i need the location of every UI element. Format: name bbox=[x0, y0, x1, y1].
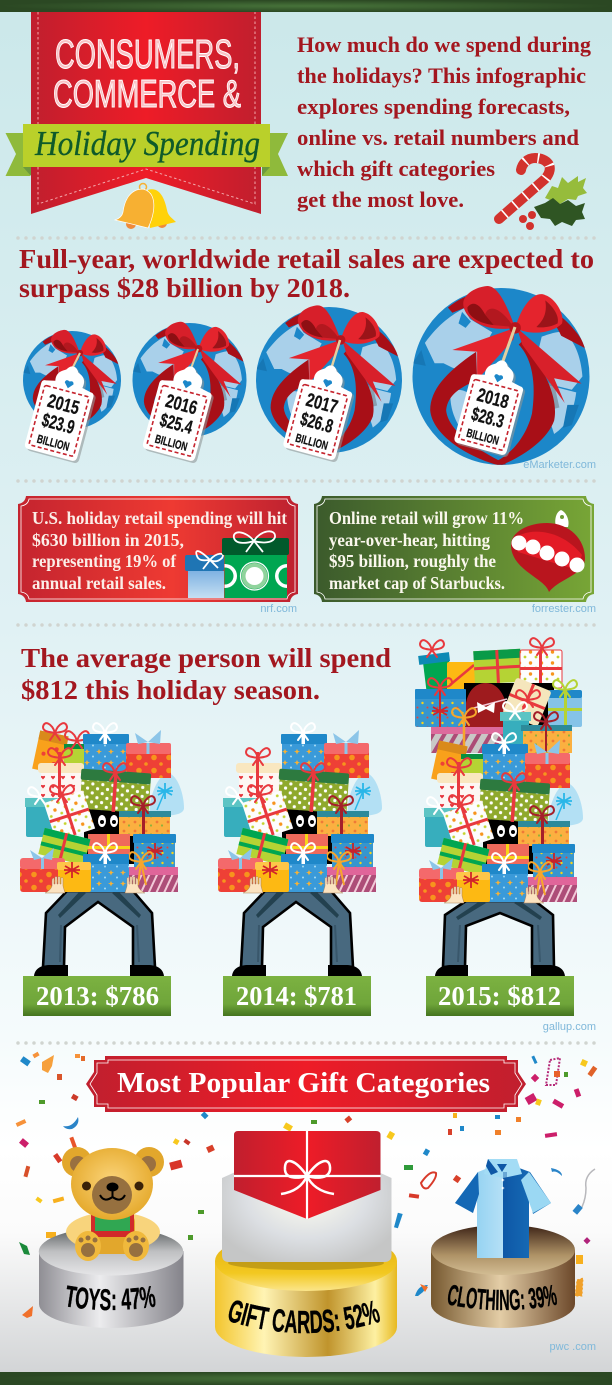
label 2014 bbox=[223, 976, 371, 1016]
globe 2016 bbox=[132, 322, 246, 464]
globe 2015 bbox=[23, 330, 121, 464]
price tag 2016: $25.4 bbox=[157, 410, 195, 439]
pedestal: clothing: CLOTHING: 39% bbox=[448, 1284, 557, 1310]
price tag 2016 bbox=[141, 360, 220, 464]
pedestal: clothing bbox=[431, 1226, 575, 1328]
text: market cap of Starbucks. bbox=[329, 573, 505, 593]
intro text: get the most love. bbox=[297, 187, 464, 212]
pedestal: gift cards bbox=[215, 1250, 397, 1357]
legs bbox=[43, 891, 155, 967]
icon: teddy bear bbox=[62, 1147, 164, 1261]
source: gallup: gallup.com bbox=[543, 1021, 596, 1033]
divider bbox=[18, 236, 597, 240]
panel: online retail bbox=[314, 496, 594, 602]
heading banner: most popular bbox=[86, 1056, 526, 1112]
globe 2018 bbox=[412, 286, 590, 465]
pedestal: toys: TOYS: 47% bbox=[66, 1285, 156, 1310]
header banner bbox=[6, 12, 288, 214]
label bbox=[226, 1320, 385, 1333]
source: pwc: pwc .com bbox=[550, 1341, 596, 1353]
red banner bbox=[31, 12, 261, 214]
bottom green bar bbox=[0, 1372, 612, 1385]
gift stack bbox=[20, 723, 184, 893]
price tag 2018: 2018 bbox=[475, 385, 511, 413]
price tag 2017: $26.8 bbox=[298, 409, 335, 438]
text bbox=[32, 508, 287, 593]
label 2013 bbox=[23, 976, 171, 1016]
extra gifts bbox=[32, 731, 69, 775]
label bbox=[64, 1306, 158, 1310]
text: $95 billion, roughly the bbox=[329, 551, 496, 571]
source: nrf: nrf.com bbox=[260, 603, 297, 615]
price tag 2017 bbox=[282, 359, 361, 463]
pedestal: gift cards: GIFT CARDS: 52% bbox=[228, 1300, 380, 1334]
price tag 2015: 2015 bbox=[45, 391, 82, 419]
intro text: which gift categories bbox=[297, 156, 495, 181]
panel: retail spending bbox=[18, 496, 299, 602]
label 2013: 2013: $786 bbox=[36, 981, 159, 1011]
text bbox=[329, 508, 524, 593]
pedestal: toys bbox=[38, 1232, 184, 1328]
label 2015: 2015: $812 bbox=[438, 981, 561, 1011]
intro text: How much do we spend during bbox=[297, 32, 591, 57]
person 2013 bbox=[20, 723, 184, 976]
gift stack bbox=[419, 733, 583, 903]
text: $630 billion in 2015, bbox=[32, 530, 184, 550]
text: representing 19% of bbox=[32, 551, 176, 571]
title: COMMERCE & bbox=[53, 73, 241, 116]
intro text: online vs. retail numbers and bbox=[297, 125, 579, 150]
confetti bbox=[16, 1052, 597, 1318]
heading: worldwide sales: surpass $28 billion by 2018. bbox=[19, 272, 350, 303]
divider bbox=[18, 479, 597, 483]
title: CONSUMERS, bbox=[55, 31, 240, 77]
top gifts bbox=[415, 638, 582, 760]
price tag 2015: BILLION bbox=[35, 432, 71, 454]
price tag 2018 bbox=[453, 354, 532, 458]
divider bbox=[18, 1041, 597, 1045]
heading text: Most Popular Gift Categories bbox=[117, 1068, 490, 1099]
price tag 2016: 2016 bbox=[163, 391, 199, 419]
intro text bbox=[297, 32, 591, 212]
icon: ornament bbox=[511, 510, 585, 592]
heading: average spend: $812 this holiday season. bbox=[21, 674, 320, 705]
heading: average spend bbox=[21, 642, 391, 705]
source: eMarketer: eMarketer.com bbox=[523, 459, 596, 471]
label bbox=[446, 1304, 559, 1310]
globe 2017 bbox=[256, 305, 402, 463]
heading: worldwide sales: Full-year, worldwide retail sales are expected to bbox=[19, 243, 594, 274]
icon: green gift bbox=[222, 530, 289, 598]
icon: bells bbox=[115, 184, 176, 229]
price tag 2016: BILLION bbox=[153, 432, 189, 454]
price tag 2015: $23.9 bbox=[39, 410, 77, 439]
text: U.S. holiday retail spending will hit bbox=[32, 508, 287, 528]
source: forrester: forrester.com bbox=[532, 603, 596, 615]
price tag 2017: BILLION bbox=[294, 431, 329, 453]
icon: shirt bbox=[455, 1159, 551, 1258]
legs bbox=[443, 901, 554, 967]
gift stack bbox=[218, 723, 382, 893]
heading: average spend: The average person will spend bbox=[21, 642, 391, 673]
icon: blue gift bbox=[185, 551, 224, 598]
intro text: the holidays? This infographic bbox=[297, 63, 586, 88]
person 2015 bbox=[415, 638, 583, 976]
icon: candy cane and holly bbox=[499, 158, 587, 230]
icon: gift card envelope bbox=[222, 1131, 392, 1262]
intro text: explores spending forecasts, bbox=[297, 94, 570, 119]
price tag 2017: 2017 bbox=[304, 390, 340, 418]
label 2014: 2014: $781 bbox=[236, 981, 357, 1011]
ribbon tails bbox=[6, 133, 288, 176]
extra gifts bbox=[431, 741, 468, 785]
price tag 2015 bbox=[23, 360, 102, 464]
heading: worldwide sales bbox=[19, 243, 594, 303]
green ribbon bbox=[23, 124, 270, 167]
script subtitle: Holiday Spending bbox=[34, 124, 260, 163]
price tag 2018: BILLION bbox=[465, 426, 500, 448]
legs bbox=[241, 891, 353, 967]
divider bbox=[18, 623, 597, 627]
label 2015 bbox=[426, 976, 574, 1016]
text: Online retail will grow 11% bbox=[329, 508, 524, 528]
text: year-over-hear, hitting bbox=[329, 530, 490, 550]
text: annual retail sales. bbox=[32, 573, 166, 593]
person 2014 bbox=[218, 723, 382, 976]
top green bar bbox=[0, 0, 612, 12]
price tag 2018: $28.3 bbox=[469, 404, 506, 433]
title bbox=[53, 31, 241, 116]
